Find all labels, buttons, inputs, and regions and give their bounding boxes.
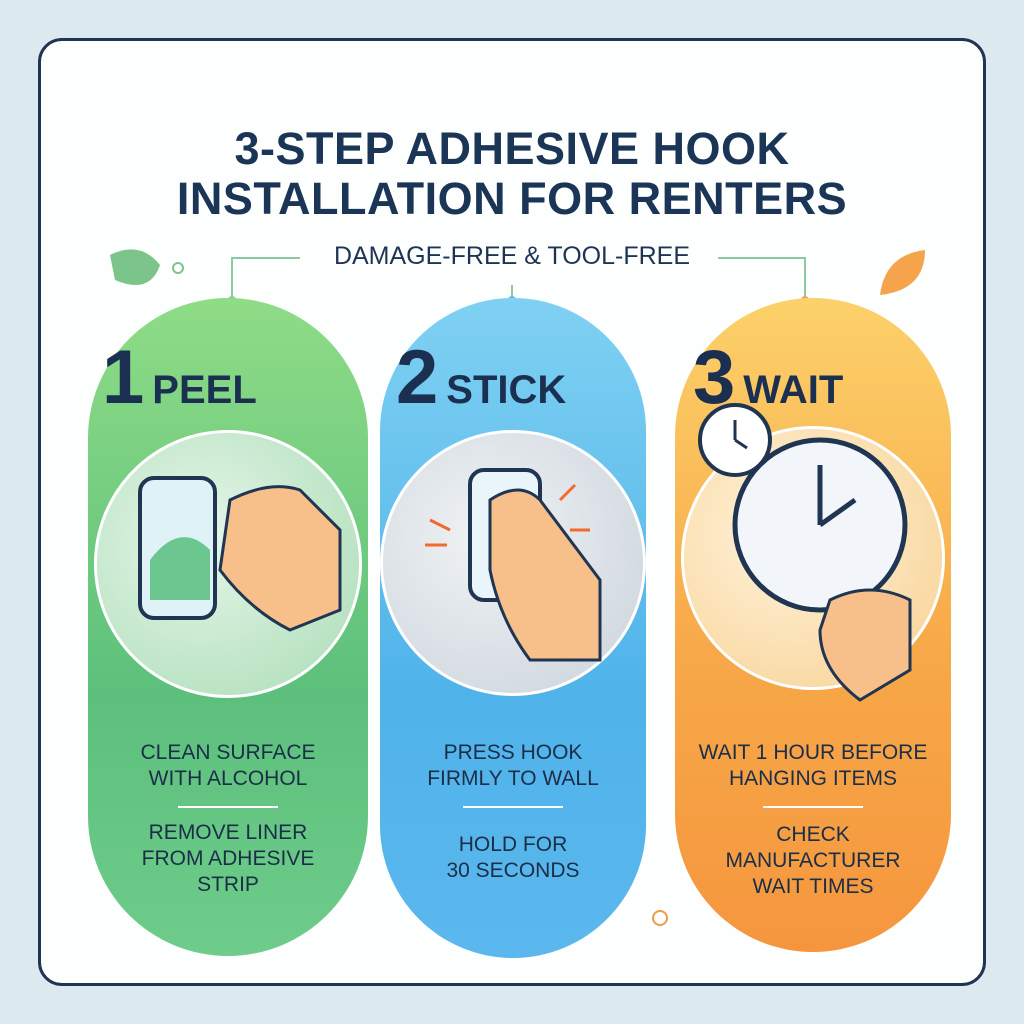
text xyxy=(140,741,316,790)
icon: clock xyxy=(700,405,910,700)
number 1: 1PEEL xyxy=(102,335,257,420)
panel: wait: CHECK xyxy=(776,823,850,846)
text xyxy=(427,741,599,790)
icon: peel hook xyxy=(140,478,340,630)
text: PRESS HOOK xyxy=(444,741,582,764)
panel: stick xyxy=(380,298,646,958)
title xyxy=(177,123,847,224)
panel: peel xyxy=(88,298,368,956)
illustration circle xyxy=(681,426,945,690)
panel: wait xyxy=(675,298,951,952)
title: INSTALLATION FOR RENTERS xyxy=(177,173,847,224)
panel: peel: STRIP xyxy=(197,873,259,896)
text: HANGING ITEMS xyxy=(729,767,897,790)
icon: stick hook xyxy=(425,470,600,660)
panel: wait: MANUFACTURER xyxy=(725,849,900,872)
text: WITH ALCOHOL xyxy=(149,767,307,790)
illustration circle xyxy=(380,430,646,696)
number 3: 3WAIT xyxy=(693,335,843,420)
panel: peel: FROM ADHESIVE xyxy=(142,847,314,870)
panel: stick: HOLD FOR xyxy=(459,833,567,856)
text: CLEAN SURFACE xyxy=(140,741,316,764)
illustration circle xyxy=(94,430,362,698)
title: 3-STEP ADHESIVE HOOK xyxy=(234,123,790,174)
text xyxy=(698,741,927,790)
subtitle: DAMAGE-FREE & TOOL-FREE xyxy=(334,242,690,270)
number 2: 2STICK xyxy=(396,335,566,420)
panel: stick: 30 SECONDS xyxy=(446,859,580,882)
text: WAIT 1 HOUR BEFORE xyxy=(699,741,927,764)
panel: wait: WAIT TIMES xyxy=(753,875,873,898)
text: FIRMLY TO WALL xyxy=(427,767,599,790)
panel: peel: REMOVE LINER xyxy=(149,821,307,844)
